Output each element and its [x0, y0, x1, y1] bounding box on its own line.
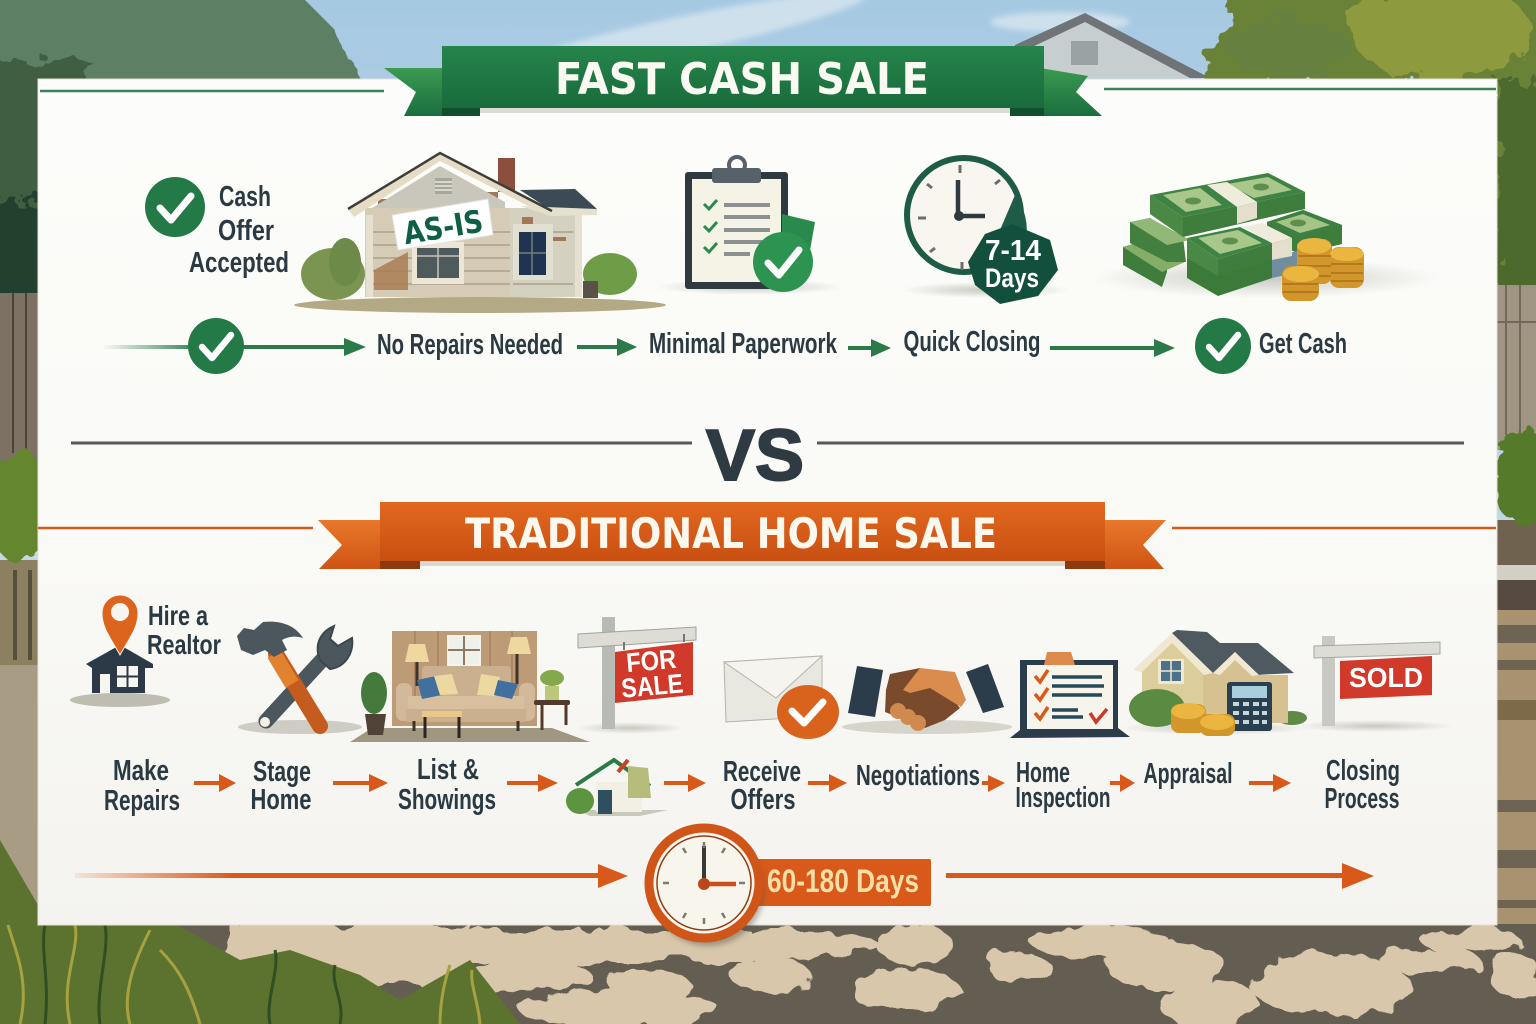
banner: traditional home sale — [318, 502, 1166, 569]
label: make repairs: Make — [113, 755, 169, 787]
background: grass — [0, 840, 520, 1024]
label: quick closing: Quick Closing — [904, 326, 1040, 358]
background: bushes — [0, 430, 1536, 563]
icon: check badge end — [1195, 318, 1251, 374]
coins: stacks — [1282, 238, 1364, 301]
arrow — [507, 774, 558, 792]
step: cash offer accepted — [145, 177, 289, 279]
icon: hammer and wrench — [237, 622, 362, 734]
cash: top stack — [1150, 173, 1305, 237]
banner: fast cash sale — [384, 46, 1102, 116]
label: 60-180 days tag — [745, 859, 931, 906]
banner: fast cash sale: FAST CASH SALE — [555, 54, 929, 105]
cash: bottom front stack — [1187, 250, 1300, 296]
label: 60-180 days tag: 60-180 Days — [767, 863, 919, 899]
arrow — [664, 774, 706, 792]
arrow: left timeline — [75, 864, 628, 888]
arrow: to minimal paperwork — [577, 338, 637, 356]
arrow — [333, 774, 388, 792]
arrow — [1249, 774, 1291, 792]
flow row: traditional steps — [104, 754, 1400, 817]
icon: sold sign: SOLD — [1349, 662, 1423, 693]
step: cash offer accepted: Cash — [219, 181, 271, 213]
icon: inspection checklist board — [1010, 652, 1130, 738]
label: closing process: Process — [1324, 783, 1400, 815]
label: appraisal: Appraisal — [1144, 758, 1232, 790]
icon: small house with tag — [566, 760, 668, 816]
step: hire a realtor: Realtor — [147, 629, 221, 660]
icon: staged living room — [350, 631, 590, 742]
label: stage home — [250, 756, 312, 816]
label: no repairs needed: No Repairs Needed — [377, 329, 563, 361]
section: traditional home sale — [38, 502, 1496, 946]
label: stage home: Stage — [253, 756, 311, 788]
label: home inspection: Inspection — [1016, 782, 1110, 814]
label: receive offers: Receive — [723, 756, 801, 788]
arrow — [194, 774, 236, 792]
step: cash offer accepted: Accepted — [189, 247, 289, 279]
background: fences and low walls — [0, 285, 1536, 665]
label: closing process: Closing — [1326, 755, 1400, 787]
arrow: start to no repairs — [102, 338, 366, 356]
icon: clock — [649, 828, 764, 946]
label: stage home: Home — [250, 784, 312, 816]
flow row: fast cash steps — [102, 318, 1347, 374]
icon: sold sign — [1295, 636, 1455, 732]
label: home inspection — [1016, 757, 1110, 814]
label: list and showings: Showings — [398, 784, 496, 816]
arrow — [982, 775, 1005, 792]
icon: as-is house: AS-IS — [401, 204, 486, 252]
label: negotiations: Negotiations — [856, 760, 980, 792]
decorative line left and right of banner — [40, 89, 1496, 91]
label: home inspection: Home — [1016, 757, 1070, 789]
background: cracked ground — [0, 610, 1536, 1024]
icon: clock 7-14 days — [900, 158, 1070, 304]
arrow: to get cash — [1050, 339, 1175, 357]
icon: clock 7-14 days: Days — [985, 263, 1039, 293]
icon: for sale sign: SALE — [620, 668, 684, 704]
arrow: to quick closing — [848, 339, 891, 357]
step: cash offer accepted: Offer — [218, 215, 274, 247]
section: fast cash sale — [40, 46, 1496, 374]
icon: for sale sign — [575, 617, 696, 734]
icon: for sale sign: FOR — [625, 644, 677, 678]
cash: back right stack — [1267, 210, 1342, 254]
icon: clock 7-14 days: 7-14 — [985, 235, 1041, 267]
arrow — [1110, 774, 1135, 792]
background: trees — [0, 0, 1536, 300]
icon: house with coins and calculator — [1120, 630, 1310, 736]
icon: envelope with check — [724, 656, 839, 739]
background: house behind banner — [1015, 13, 1210, 78]
arrow: right timeline — [946, 863, 1374, 889]
label: closing process — [1324, 755, 1400, 815]
panel: main white board — [38, 79, 1497, 925]
divider: vs: VS — [706, 416, 804, 496]
label: list and showings — [398, 754, 496, 816]
label: receive offers — [723, 756, 801, 816]
icon: cash stacks and coins — [1090, 173, 1440, 301]
icon: check badge start — [188, 318, 244, 374]
label: make repairs — [104, 755, 180, 817]
timeline: 60-180 days — [75, 828, 1374, 946]
arrow — [808, 774, 847, 792]
banner: traditional home sale: TRADITIONAL HOME SALE — [465, 509, 997, 558]
step: hire a realtor — [70, 595, 221, 707]
label: make repairs: Repairs — [104, 785, 180, 817]
cash: lower left stack — [1123, 244, 1185, 287]
label: receive offers: Offers — [730, 784, 796, 816]
label: minimal paperwork: Minimal Paperwork — [649, 328, 838, 360]
cash: top front stack — [1187, 223, 1292, 276]
icon: handshake — [842, 664, 1012, 734]
icon: clipboard with check — [655, 157, 845, 295]
label: list and showings: List & — [417, 754, 479, 786]
cash: upper left stack — [1130, 218, 1190, 262]
step: hire a realtor: Hire a — [148, 600, 208, 631]
label: get cash: Get Cash — [1259, 328, 1347, 360]
icon: as-is house — [294, 153, 666, 313]
